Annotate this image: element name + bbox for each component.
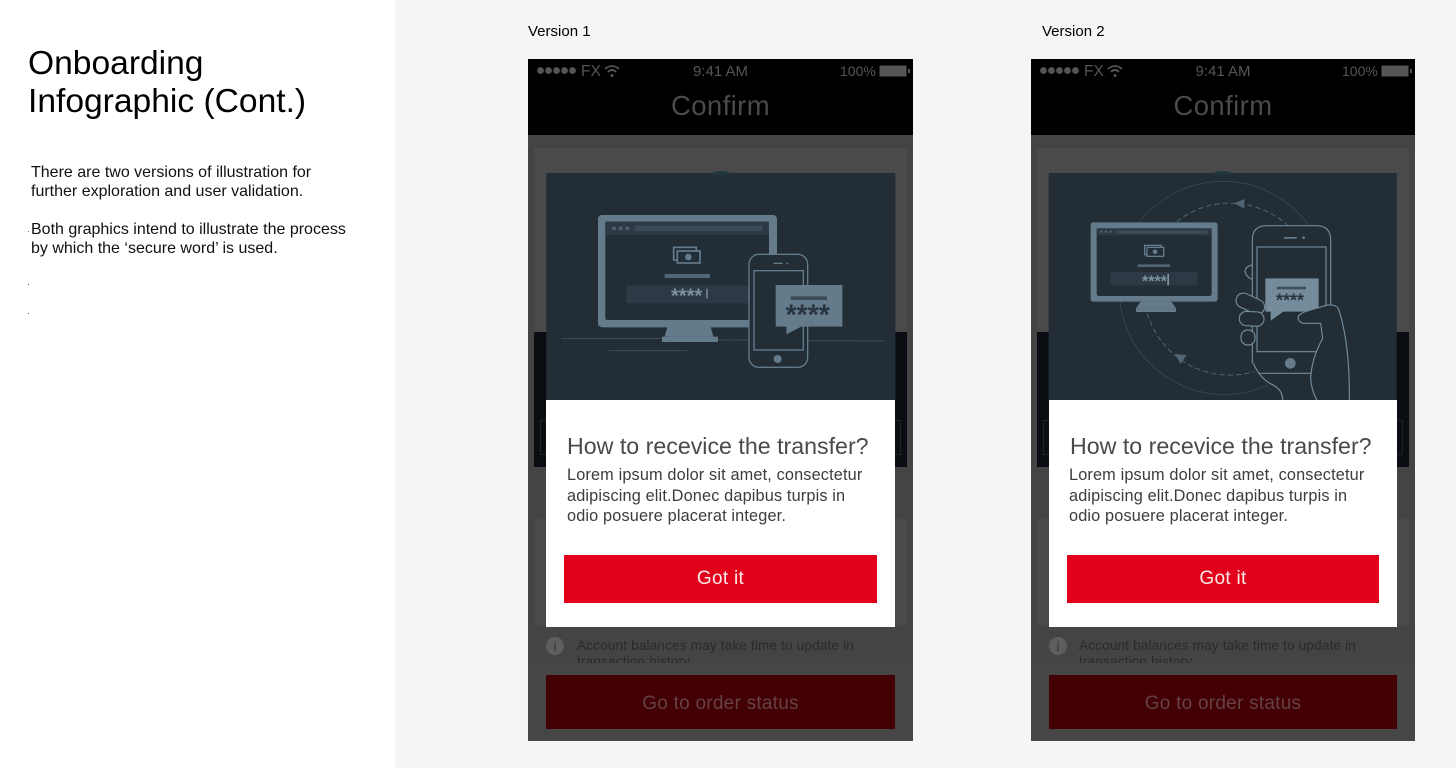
- got it button: [1067, 555, 1379, 603]
- modal text: [1069, 466, 1364, 525]
- modal text: Lorem ipsum dolor sit amet, consectetur: [1069, 466, 1364, 484]
- got it button: Got it: [697, 568, 744, 589]
- phone mockup: version 2: [1031, 59, 1415, 741]
- modal body: [546, 400, 895, 627]
- title: Onboarding: [28, 45, 203, 82]
- modal text: [567, 466, 862, 525]
- battery: 100%: [840, 63, 876, 79]
- info note: [1049, 637, 1356, 663]
- modal text: odio posuere placerat integer.: [1069, 507, 1288, 525]
- description text: [31, 164, 346, 257]
- modal heading: How to recevice the transfer?: [567, 433, 869, 459]
- footer button: Go to order status: [1145, 693, 1301, 714]
- got it button: Got it: [1199, 568, 1247, 589]
- right grey panel: [395, 0, 1456, 768]
- message bubble: [776, 285, 842, 334]
- signal and carrier: [537, 63, 620, 80]
- modal text: Lorem ipsum dolor sit amet, consectetur: [567, 466, 862, 484]
- modal body: [1049, 400, 1397, 627]
- monitor: ****: [671, 285, 702, 307]
- rotation arcs: [1120, 181, 1308, 395]
- description text: Both graphics intend to illustrate the process: [31, 221, 346, 238]
- battery: 100%: [1342, 63, 1378, 79]
- got it button: [564, 555, 877, 603]
- battery: [1342, 63, 1412, 79]
- clock: 9:41 AM: [693, 63, 748, 80]
- info note: Account balances may take time to update in: [577, 638, 854, 653]
- signal and carrier: FX: [1084, 63, 1104, 80]
- monitor: [1091, 222, 1218, 312]
- info icon: [546, 637, 564, 655]
- title: [28, 45, 306, 120]
- header title: Confirm: [671, 90, 770, 121]
- clock: 9:41 AM: [1195, 63, 1251, 80]
- info note: [546, 637, 854, 663]
- battery: [840, 63, 910, 79]
- app content behind overlay: [528, 135, 913, 741]
- smartphone: [749, 254, 808, 367]
- title: Infographic (Cont.): [28, 83, 306, 120]
- illustration: monitor, hand and phone: [1048, 171, 1397, 400]
- footer button: Go to order status: [642, 693, 799, 714]
- status bar and header: [1031, 59, 1415, 135]
- illustration: monitor and phone: [546, 171, 896, 400]
- signal and carrier: FX: [581, 63, 601, 80]
- hand: [1234, 291, 1349, 401]
- header title: Confirm: [1173, 90, 1273, 121]
- modal text: adipiscing elit.Donec dapibus turpis in: [567, 486, 845, 504]
- smartphone: [1252, 226, 1331, 373]
- monitor: [598, 215, 777, 342]
- info icon: i: [1056, 638, 1060, 654]
- info icon: [1049, 637, 1067, 655]
- footer button: [1049, 675, 1397, 729]
- modal text: adipiscing elit.Donec dapibus turpis in: [1069, 486, 1347, 504]
- footer button: [546, 675, 895, 729]
- info icon: i: [553, 638, 557, 654]
- signal and carrier: [1040, 63, 1122, 80]
- modal heading: How to recevice the transfer?: [1070, 433, 1372, 459]
- phone mockup: version 1: [528, 59, 913, 741]
- info note: Account balances may take time to update in: [1079, 638, 1356, 653]
- message bubble: ****: [786, 299, 830, 331]
- stray mark dots: [28, 231, 29, 314]
- version 1 label: Version 1: [528, 23, 591, 40]
- message bubble: [1265, 278, 1319, 321]
- description text: by which the ‘secure word’ is used.: [31, 240, 278, 257]
- version 2 label: Version 2: [1042, 23, 1105, 40]
- description text: further exploration and user validation.: [31, 183, 303, 200]
- message bubble: ****: [1276, 290, 1304, 310]
- monitor: ****: [1142, 274, 1168, 291]
- description text: There are two versions of illustration for: [31, 164, 311, 181]
- fingers behind phone: [1245, 265, 1252, 279]
- status bar and header: [528, 59, 913, 135]
- app content behind overlay: [1031, 135, 1415, 741]
- modal text: odio posuere placerat integer.: [567, 507, 786, 525]
